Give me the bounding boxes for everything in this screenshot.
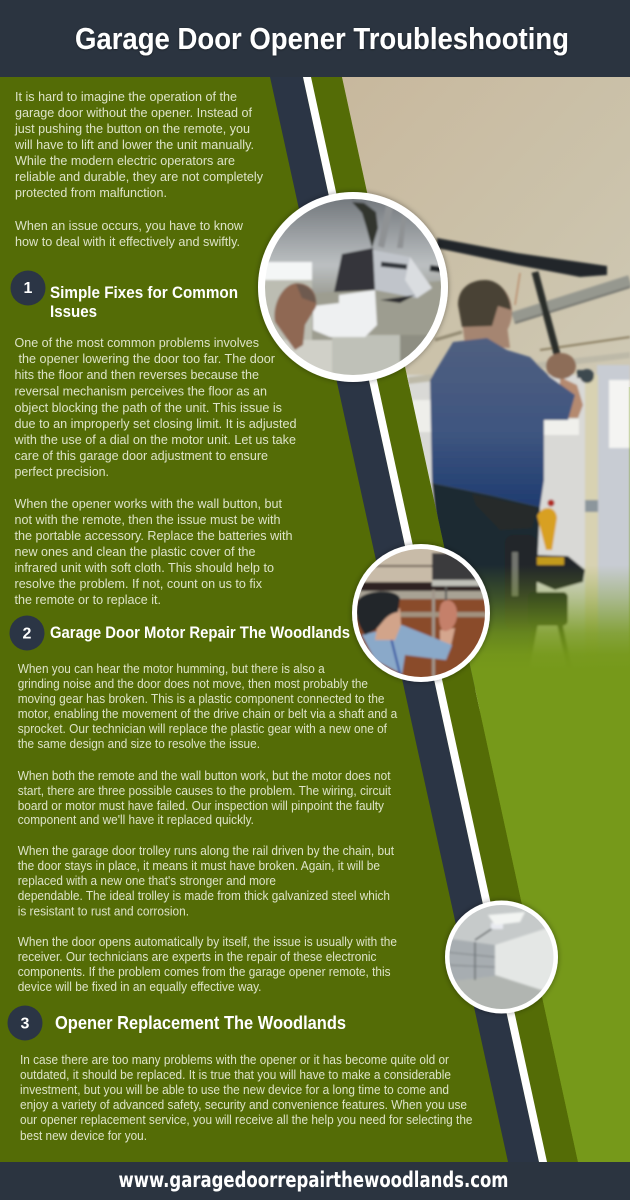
text block: introduction: protected from malfunction. — [15, 186, 167, 200]
text block: section 3 paragraph: our opener replacement service, you will receive all the help you need for selecting the — [20, 1113, 473, 1127]
text block: section 2 paragraph 1: the same design and size to resolve the issue. — [18, 737, 260, 751]
text block: section 2 paragraph 1: sprocket. Our technician will replace the plastic gear with a new one of — [18, 722, 387, 736]
text block: section 2 paragraph 3 — [18, 844, 394, 918]
text block: introduction: garage door without the opener. Instead of — [15, 106, 253, 120]
text block: section 3 paragraph: outdated, it should be replaced. It is true that you will have to make a considerable — [20, 1068, 451, 1082]
text block: section 2 paragraph 3: the door stays in place, it means it must have broken. Again, it will be — [18, 859, 380, 873]
section 1 heading: Issues — [50, 302, 97, 321]
panel: bright green right side — [342, 77, 630, 1162]
text block: section 1 paragraph 1: perfect precision. — [14, 465, 109, 479]
white diagonal stripe — [303, 77, 547, 1162]
section 1 heading: Simple Fixes for Common — [50, 283, 238, 302]
text block: section 2 paragraph 4: receiver. Our technicians are experts in the repair of these electronic — [18, 950, 376, 964]
text block: section 2 paragraph 3: When the garage door trolley runs along the rail driven by the chain, but — [18, 844, 394, 858]
text block: section 1 paragraph 1: care of this garage door adjustment to ensure — [14, 449, 268, 463]
text block: section 2 paragraph 3: is resistant to rust and corrosion. — [18, 904, 189, 918]
section 2 number badge — [10, 616, 44, 650]
header bar — [0, 0, 630, 77]
text block: section 2 paragraph 1: grinding noise and the door does not move, then most probably the — [18, 677, 368, 691]
text block: section 1 paragraph 1: with the use of a dial on the motor unit. Let us take — [13, 433, 296, 447]
text block: section 1 paragraph 2 — [14, 497, 293, 607]
circular photo 1: opener unit — [258, 192, 450, 382]
navy diagonal band — [270, 77, 539, 1162]
section 2 number badge: 2 — [23, 626, 32, 642]
text block: section 2 paragraph 4: When the door opens automatically by itself, the issue is usually with the — [18, 935, 397, 949]
text block: introduction: While the modern electric operators are — [15, 154, 235, 168]
section 1 number badge — [10, 270, 46, 306]
text block: introduction: reliable and durable, they are not completely — [15, 170, 264, 184]
text block: section 1 paragraph 1: object blocking the path of the unit. This issue is — [14, 401, 282, 415]
text block: section 2 paragraph 2: When both the remote and the wall button work, but the motor does not — [18, 769, 391, 783]
text block: section 2 paragraph 4 — [18, 935, 397, 994]
text block: section 3 paragraph — [20, 1053, 473, 1143]
text block: section 2 paragraph 3: replaced with a new one that's stronger and more — [18, 874, 276, 888]
text block: section 1 paragraph 1: hits the floor and then reverses because the — [14, 368, 259, 382]
text block: section 3 paragraph: enjoy a variety of advanced safety, security and convenience features. When you use — [20, 1098, 467, 1112]
text block: section 1 paragraph 1: the opener lowering the door too far. The door — [18, 352, 275, 366]
text block: section 1 paragraph 1: One of the most common problems involves — [14, 336, 259, 350]
text block: section 1 paragraph 2: the remote or to replace it. — [14, 593, 161, 607]
section 3 number badge — [8, 1006, 42, 1040]
text block: section 2 paragraph 4: components. If the problem comes from the garage opener remote, this — [18, 965, 390, 979]
text block: section 3 paragraph: best new device for you. — [20, 1129, 147, 1143]
text block: introduction — [14, 90, 264, 249]
text block: section 1 paragraph 1: reversal mechanism perceives the floor as an — [14, 384, 267, 398]
text block: section 1 paragraph 2: not with the remote, then the issue must be with — [14, 513, 281, 527]
footer bar — [0, 1162, 630, 1200]
text block: section 2 paragraph 2: component and we'll have it replaced quickly. — [18, 813, 254, 827]
circular photo 2: technician adjusting opener — [350, 544, 495, 682]
text block: section 2 paragraph 2: start, there are three possible causes to the problem. The wiring, circuit — [18, 784, 391, 798]
section 3 heading: Opener Replacement The Woodlands — [55, 1013, 346, 1033]
text block: section 3 paragraph: In case there are too many problems with the opener or it has become quite old or — [20, 1053, 449, 1067]
text block: introduction: It is hard to imagine the operation of the — [15, 90, 237, 104]
text block: section 2 paragraph 3: dependable. The ideal trolley is made from thick galvanized steel which — [18, 889, 390, 903]
text block: section 2 paragraph 1: When you can hear the motor humming, but there is also a — [18, 662, 325, 676]
text block: section 1 paragraph 2: the portable accessory. Replace the batteries with — [14, 529, 293, 543]
text block: introduction: When an issue occurs, you have to know — [15, 219, 244, 233]
section 2 heading: Garage Door Motor Repair The Woodlands — [50, 623, 350, 642]
text block: section 2 paragraph 4: device will be fixed in an equally effective way. — [18, 980, 262, 994]
title: Garage Door Opener Troubleshooting — [75, 21, 569, 56]
section 1 number badge: 1 — [24, 280, 33, 297]
section 3 number badge: 3 — [21, 1016, 30, 1032]
text block: section 1 paragraph 2: When the opener works with the wall button, but — [14, 497, 283, 511]
section 1 heading — [50, 283, 238, 321]
circular photo 3: empty garage — [445, 900, 560, 1015]
text block: section 1 paragraph 2: new ones and clean the plastic cover of the — [14, 545, 256, 559]
text block: introduction: how to deal with it effectively and swiftly. — [15, 235, 240, 249]
text block: section 1 paragraph 1: due to an improperly set closing limit. It is adjusted — [14, 417, 297, 431]
text block: introduction: will have to lift and lower the unit manually. — [14, 138, 254, 152]
text block: section 3 paragraph: investment, but you will be able to use the new device for a long time to come and — [20, 1083, 449, 1097]
footer website address: www.garagedoorrepairthewoodlands.com — [118, 1168, 508, 1192]
text block: section 2 paragraph 1 — [18, 662, 397, 751]
text block: section 2 paragraph 1: moving gear has broken. This is a plastic component connected to the — [18, 692, 385, 706]
panel: technician photo fading into green — [340, 77, 630, 1170]
text block: section 1 paragraph 2: resolve the problem. If not, count on us to fix — [14, 577, 263, 591]
text block: section 2 paragraph 1: motor, enabling the movement of the drive chain or belt via a shaft and a — [18, 707, 397, 721]
text block: section 1 paragraph 1 — [13, 336, 297, 479]
text block: section 2 paragraph 2 — [18, 769, 391, 827]
text block: section 1 paragraph 2: infrared unit with soft cloth. This should help to — [14, 561, 274, 575]
text block: section 2 paragraph 2: board or motor must have failed. Our inspection will pinpoint the faulty — [18, 799, 385, 813]
text block: introduction: just pushing the button on the remote, you — [14, 122, 250, 136]
